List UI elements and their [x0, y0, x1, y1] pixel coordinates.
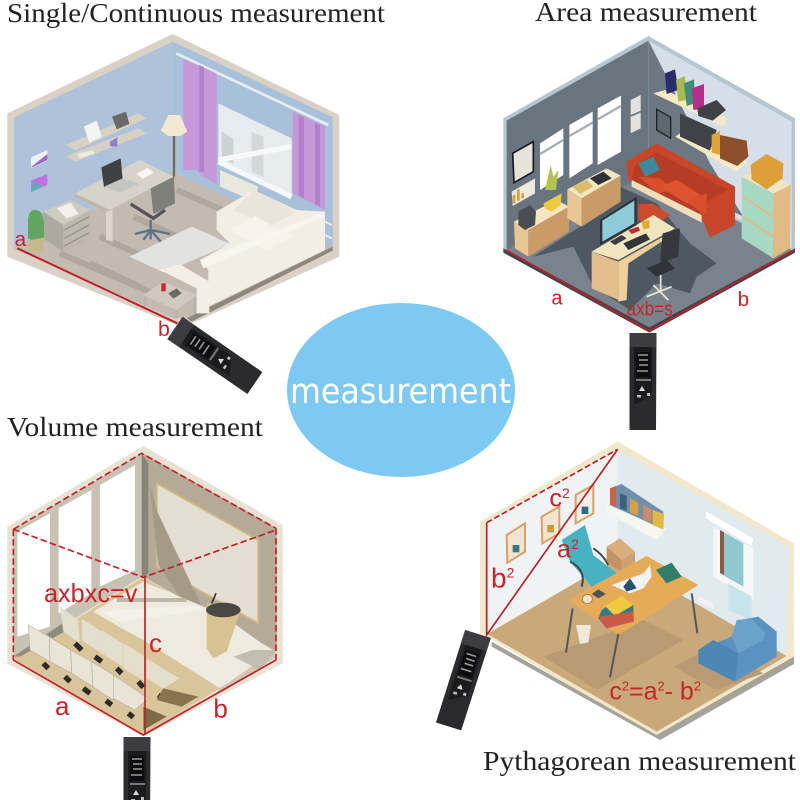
desk [566, 556, 698, 677]
audience seats back row [60, 607, 180, 688]
label b: b [738, 288, 749, 311]
seat legs [43, 643, 163, 717]
red triangle lines [487, 449, 618, 635]
desk with monitor [592, 197, 675, 302]
title: pythagorean measurement: Pythagorean measurement [483, 746, 797, 776]
wall art [512, 109, 671, 206]
label b squared: b [491, 563, 507, 594]
teal chair [562, 525, 617, 588]
volume formula: axbxc=v [44, 578, 137, 608]
wall shelves [66, 112, 147, 162]
potted plant [27, 210, 45, 253]
label b squared: 2 [507, 565, 515, 581]
low cabinets [514, 165, 621, 257]
label a squared: a [557, 536, 571, 564]
label a: a [55, 691, 70, 721]
windows [540, 95, 641, 190]
red area lines [506, 250, 794, 331]
label a squared: 2 [571, 536, 579, 552]
title: volume measurement: Volume measurement [7, 412, 264, 442]
pythagorean formula: =a [629, 678, 658, 705]
pythagorean formula: 2 [658, 680, 665, 694]
wall outlet [698, 596, 713, 608]
area formula: axb=s [627, 298, 673, 320]
filing cabinet [43, 200, 90, 252]
label a: a [15, 228, 27, 251]
red measuring line a-b [17, 248, 177, 323]
framed pictures [507, 485, 593, 563]
icon: laser measure device, single [167, 317, 263, 394]
panel: pythagorean room illustration [480, 442, 794, 740]
label c squared: 2 [562, 485, 570, 501]
pythagorean formula: 2 [622, 680, 629, 694]
desk chair [647, 228, 680, 300]
rug [129, 227, 231, 273]
panel: area room illustration [503, 36, 795, 333]
panel: single/continuous room illustration [7, 34, 339, 341]
pythagorean formula: 2 [694, 680, 701, 694]
sofa [160, 190, 325, 313]
label c squared: c [549, 485, 562, 513]
wall pictures [31, 150, 47, 192]
center ellipse badge [287, 303, 515, 477]
center ellipse badge: measurement [290, 372, 511, 412]
audience seats front row [28, 625, 148, 710]
pythagorean formula: - b [665, 678, 694, 705]
blue armchair [698, 617, 777, 682]
drawer unit [607, 538, 635, 572]
label c: c [149, 628, 162, 658]
podium [206, 593, 241, 658]
book shelves [653, 69, 748, 172]
glass cabinet with box [742, 154, 791, 258]
label b: b [213, 693, 228, 723]
wastebasket [576, 625, 591, 644]
desk with laptop [75, 158, 173, 242]
icon: laser measure device, area [630, 333, 656, 430]
pythagorean formula: c [609, 678, 622, 705]
icon: laser measure device, pythagorean [436, 630, 491, 731]
red sofa [627, 143, 735, 237]
label a: a [551, 288, 563, 310]
wall bookshelf [606, 484, 667, 540]
icon: laser measure device, volume [124, 737, 150, 800]
label b: b [158, 317, 170, 341]
red volume lines [13, 453, 276, 735]
floor lamp [161, 115, 187, 177]
window with blind [706, 512, 753, 620]
office chair [131, 177, 175, 242]
panel: volume room illustration [7, 446, 283, 737]
side table [143, 282, 197, 318]
